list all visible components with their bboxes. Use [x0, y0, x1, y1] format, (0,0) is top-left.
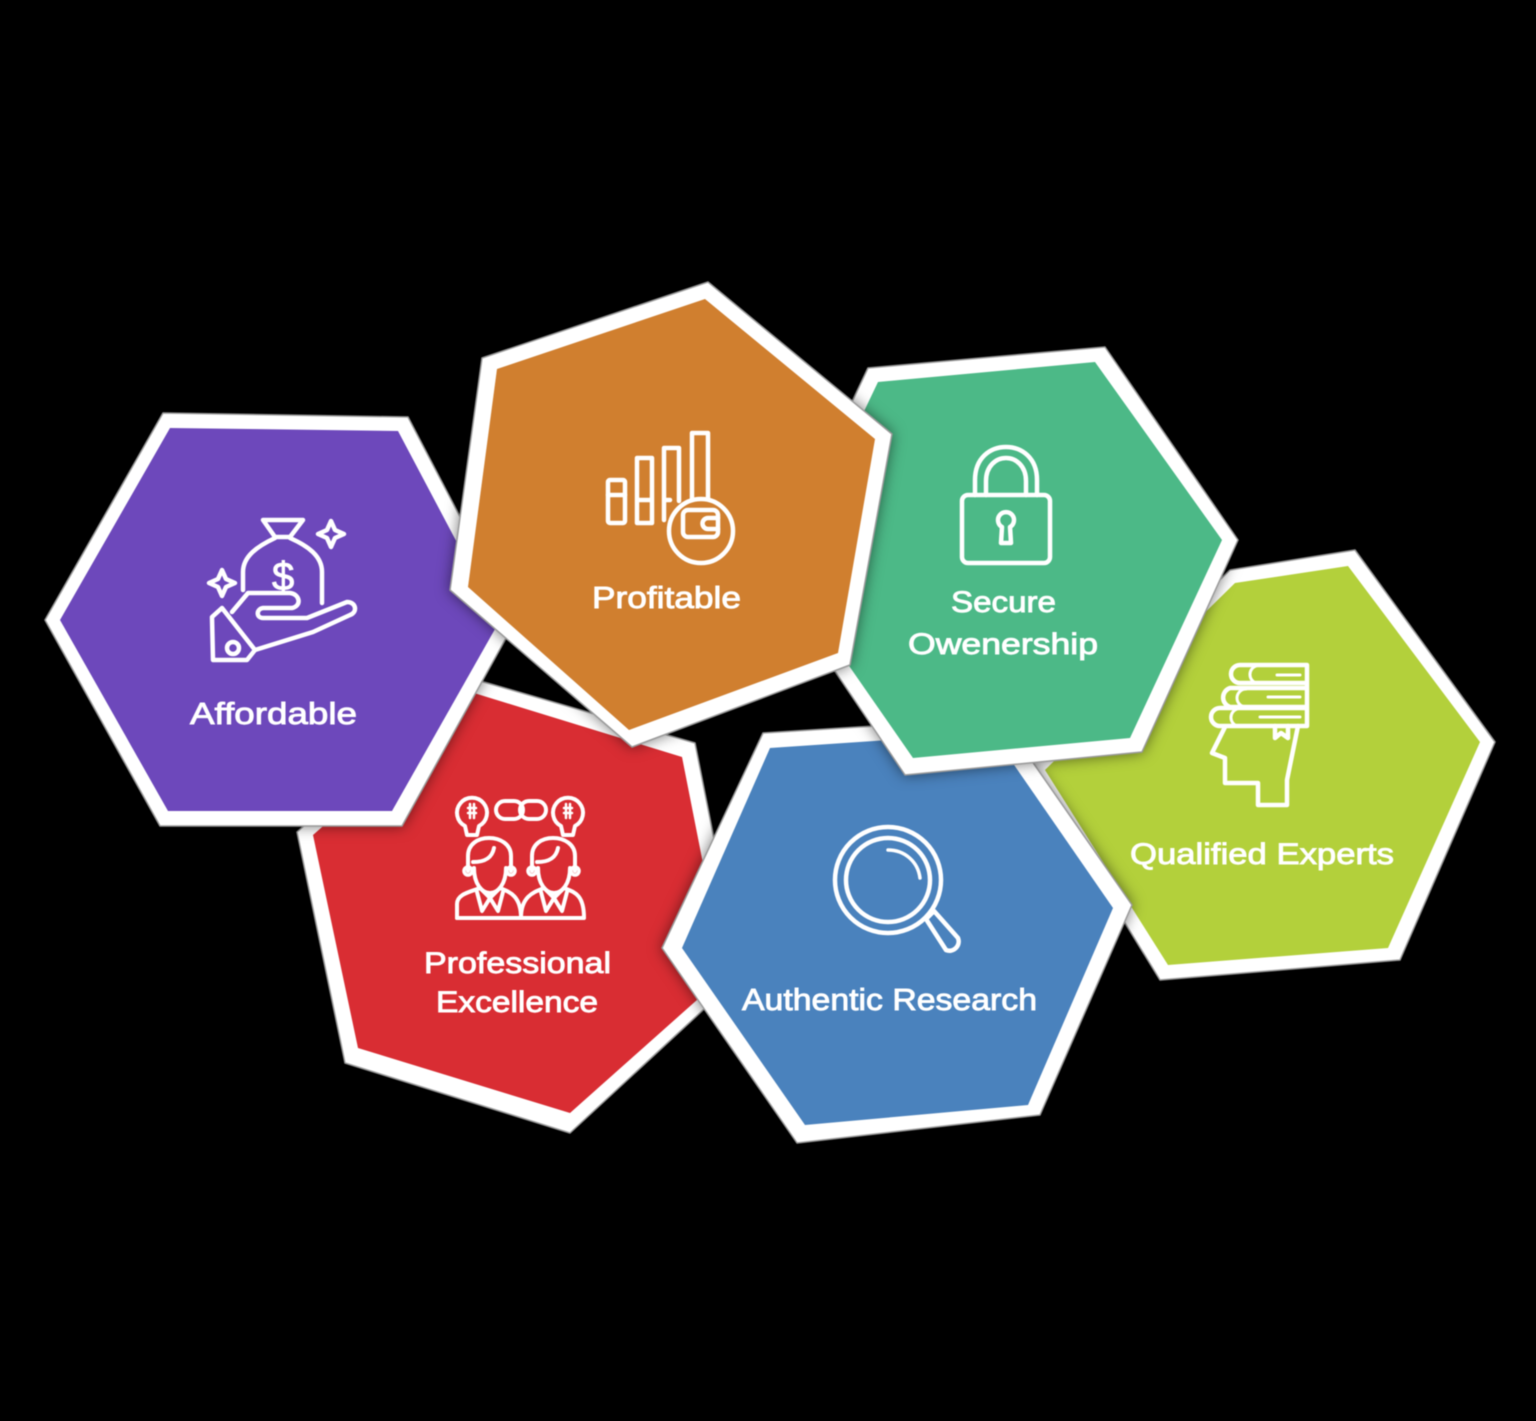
icon: magnifying glass [835, 827, 959, 951]
panel: Profitable [450, 282, 892, 747]
label: Professional Excellence: Professional [424, 947, 611, 980]
label: Professional Excellence: Excellence [436, 986, 598, 1019]
label: Secure Owenership: Secure [951, 586, 1056, 619]
panel: Professional Excellence [297, 678, 741, 1133]
panel: Authentic Research [662, 718, 1132, 1143]
icon: team with bulbs and link [457, 798, 584, 918]
panel: Affordable [45, 413, 515, 826]
label: Secure Owenership: Owenership [908, 628, 1098, 661]
label: Authentic Research: Authentic Research [742, 982, 1037, 1017]
label: Professional Excellence [424, 947, 611, 1019]
icon: bars and wallet [608, 433, 733, 563]
panel: Qualified Experts [1028, 550, 1495, 980]
label: Affordable: Affordable [190, 696, 357, 731]
icon: padlock [962, 447, 1050, 563]
icon: dollar sign: $ [272, 555, 294, 599]
icon: head with books [1211, 665, 1307, 805]
panel: Secure Owenership [770, 347, 1238, 775]
icon: hand holding money bag [209, 520, 355, 660]
label: Qualified Experts: Qualified Experts [1130, 838, 1394, 871]
label: Secure Owenership [908, 586, 1098, 661]
label: Profitable: Profitable [592, 580, 741, 615]
